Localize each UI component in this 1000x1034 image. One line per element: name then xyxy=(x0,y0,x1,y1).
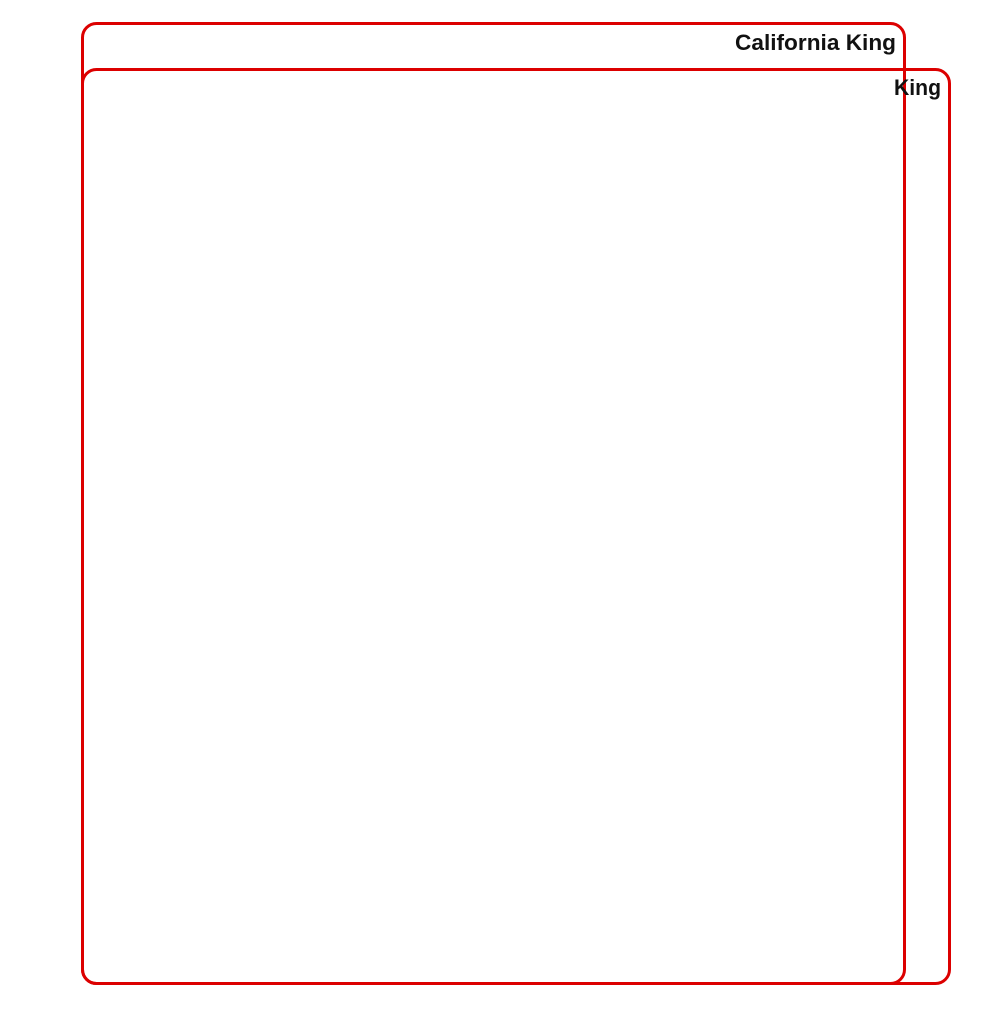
label: California King: California King xyxy=(735,30,896,55)
label: King: King xyxy=(894,75,941,100)
